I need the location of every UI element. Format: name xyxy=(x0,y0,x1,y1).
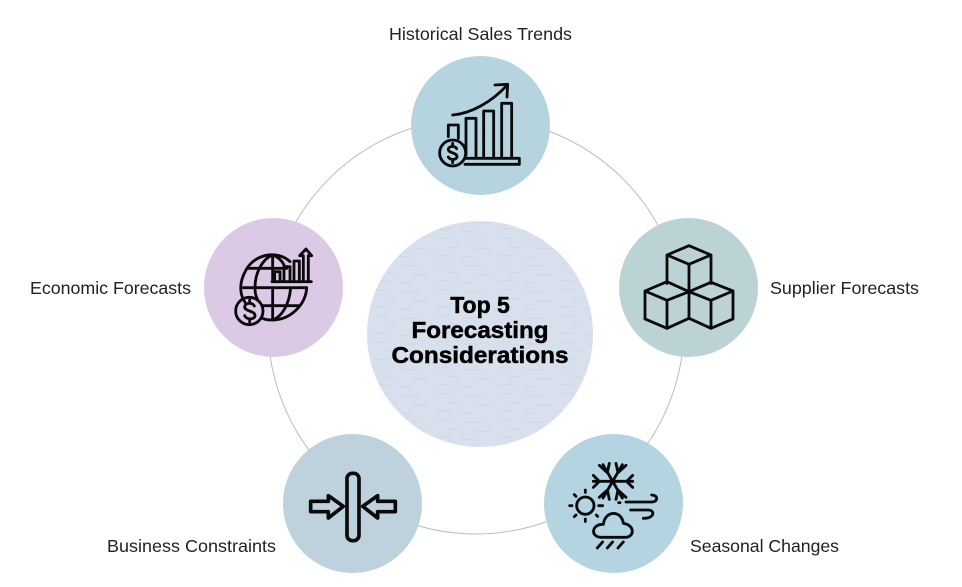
label: Historical Sales Trends xyxy=(389,24,572,44)
circle xyxy=(544,434,683,573)
center circle with title xyxy=(367,221,593,447)
circle xyxy=(411,56,550,195)
node: Historical Sales Trends xyxy=(389,24,572,195)
icon: arrows pressing on bar xyxy=(311,473,395,541)
wind xyxy=(619,495,657,518)
connecting ring xyxy=(268,118,684,534)
snowflake xyxy=(593,463,633,499)
title: Forecasting xyxy=(412,317,548,343)
circle xyxy=(283,434,422,573)
icon: stacked cubes xyxy=(645,246,733,328)
title xyxy=(392,292,568,368)
sun xyxy=(577,497,594,514)
node: Supplier Forecasts xyxy=(619,218,919,357)
label: Supplier Forecasts xyxy=(770,278,919,298)
icon: bar chart with dollar coin xyxy=(440,84,519,166)
icon: weather xyxy=(570,463,657,548)
node: Business Constraints xyxy=(107,434,422,573)
circle xyxy=(619,218,758,357)
circle xyxy=(204,218,343,357)
title: Considerations xyxy=(392,342,568,368)
rain xyxy=(597,542,623,548)
icon: globe with chart and coin xyxy=(236,249,312,325)
node: Economic Forecasts xyxy=(30,218,343,357)
label: Economic Forecasts xyxy=(30,278,191,298)
title: Top 5 xyxy=(450,292,510,318)
cloud xyxy=(594,513,632,537)
label: Business Constraints xyxy=(107,536,276,556)
label: Seasonal Changes xyxy=(690,536,839,556)
node: Seasonal Changes xyxy=(544,434,839,573)
